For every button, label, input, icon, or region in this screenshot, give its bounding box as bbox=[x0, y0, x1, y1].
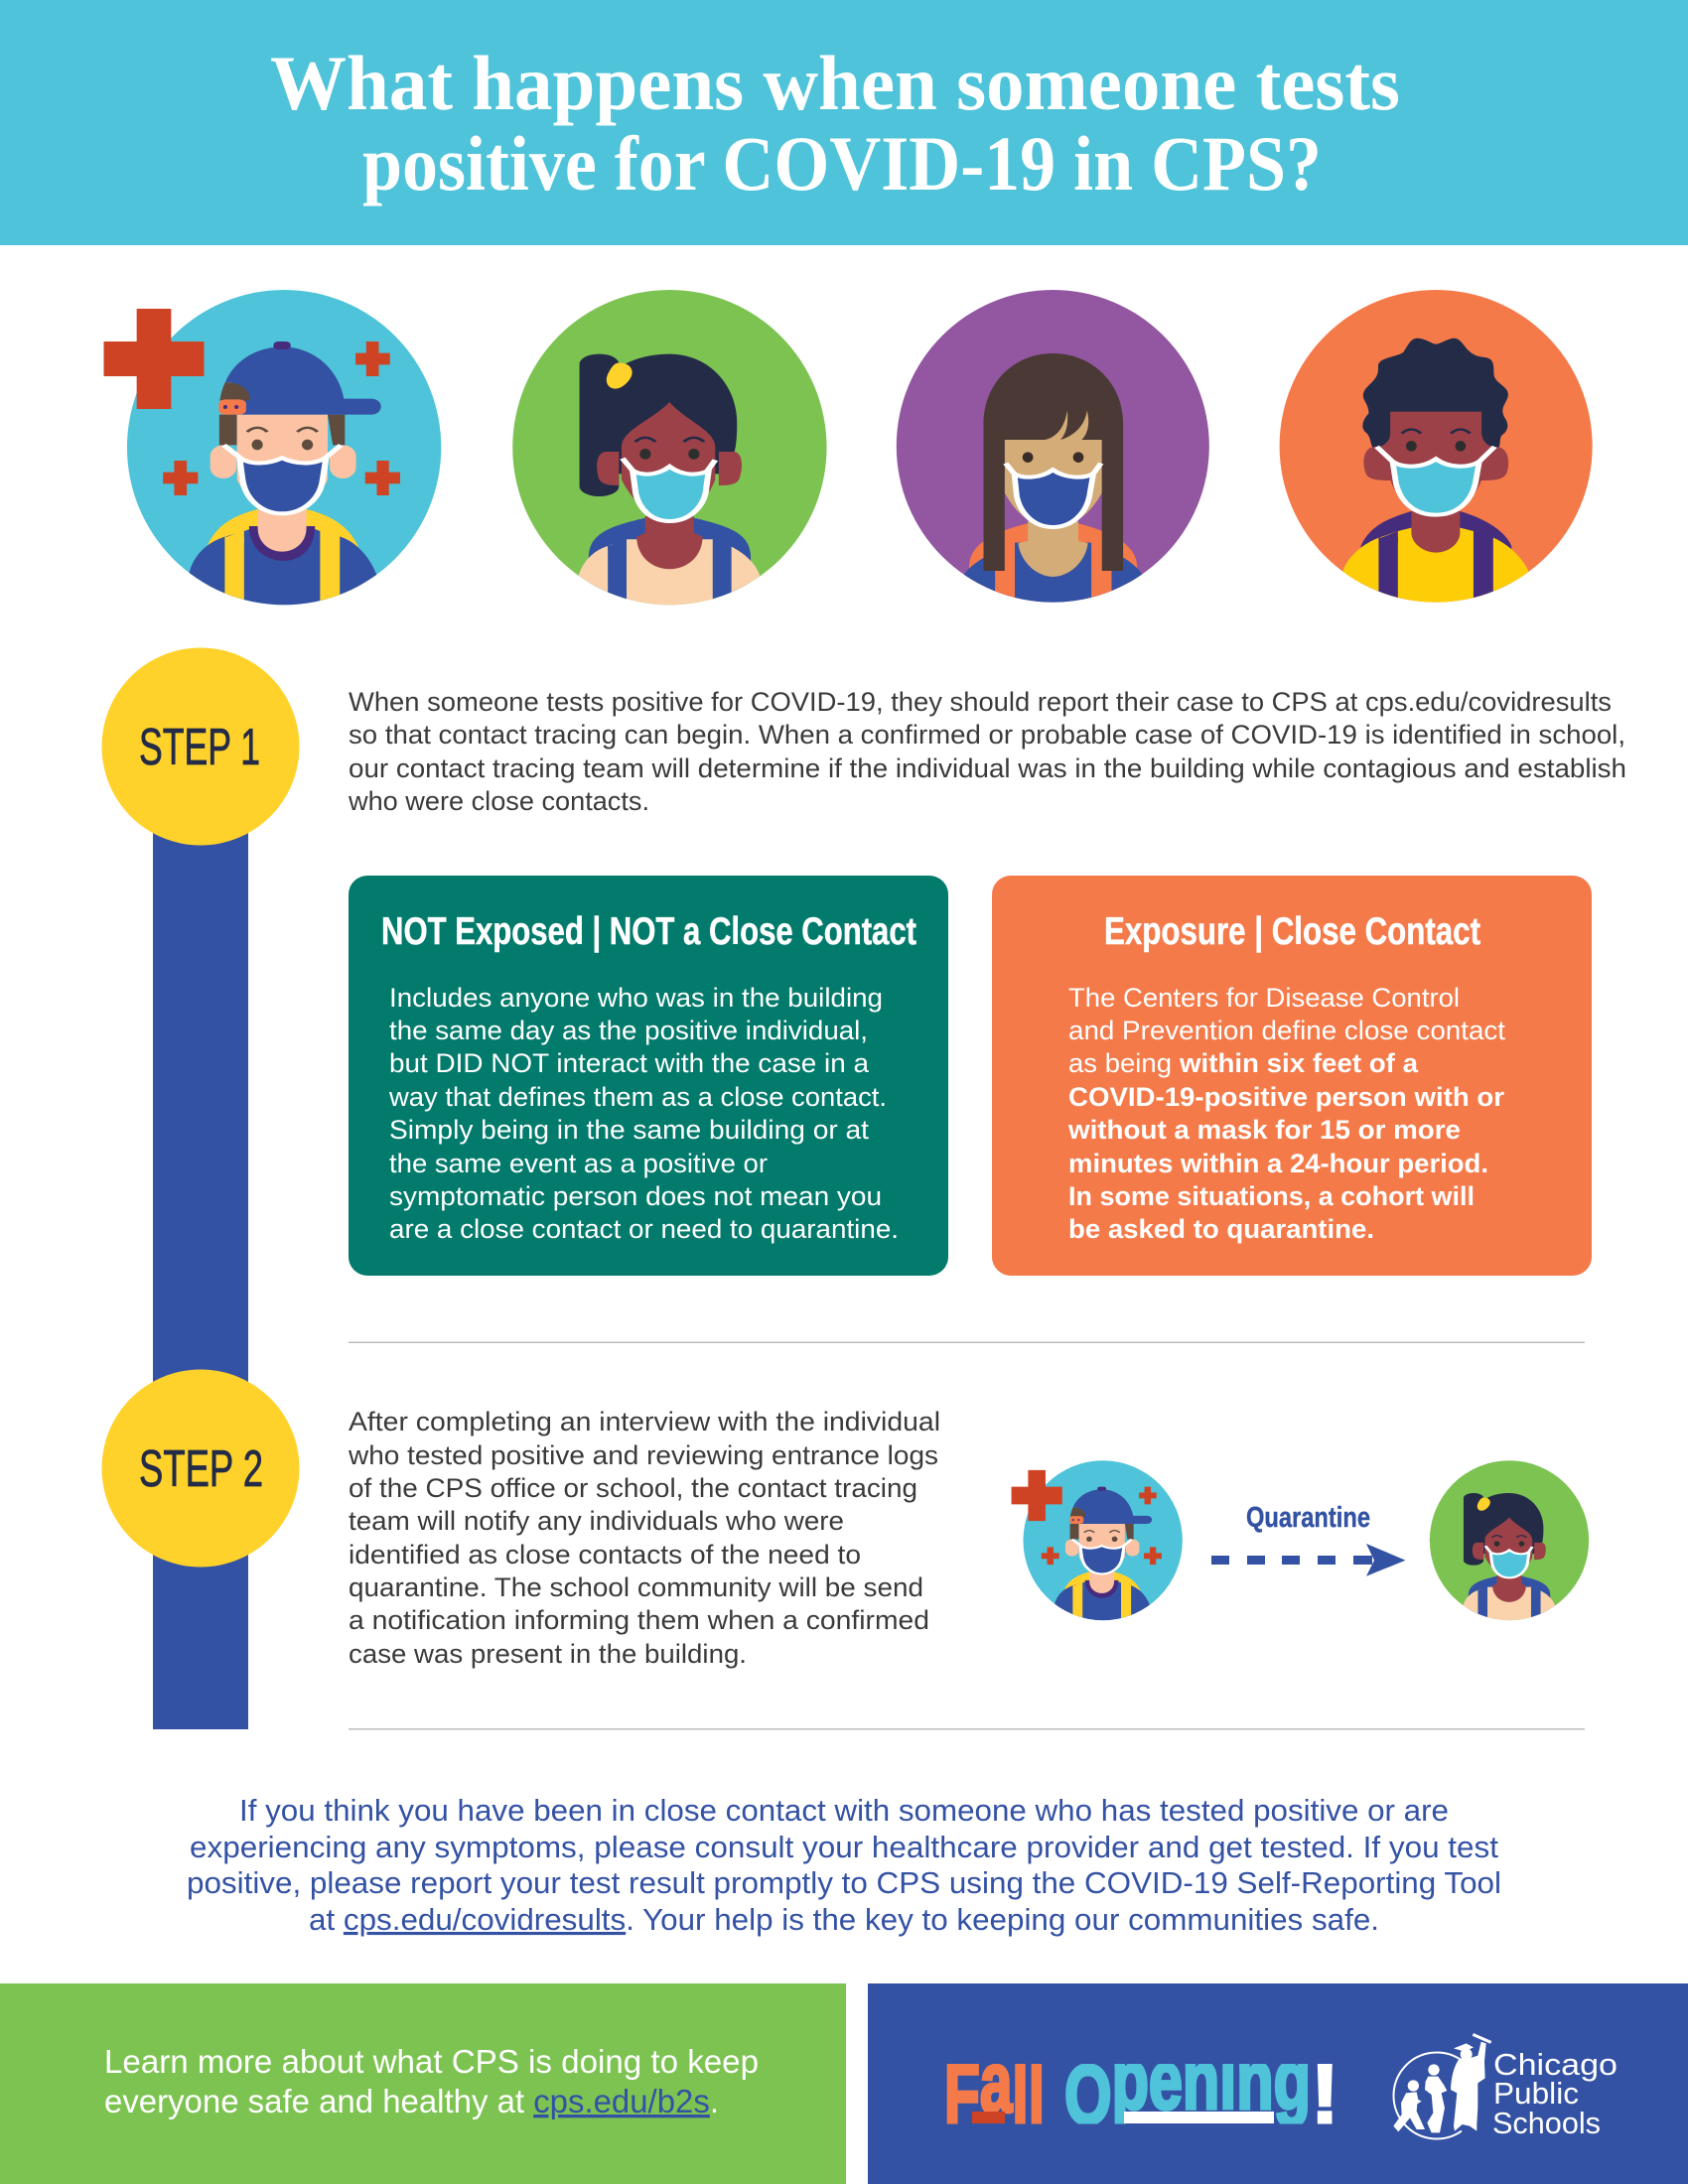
logo: fall opening: O bbox=[1064, 2048, 1129, 2141]
text: not exposed body bbox=[388, 983, 899, 1244]
logo: chicago public schools bbox=[1393, 2034, 1618, 2140]
step 1 text: our contact tracing team will determine if the individual was in the building while contagious and establish bbox=[349, 753, 1626, 783]
text: not exposed body: are a close contact or need to quarantine. bbox=[389, 1214, 899, 1244]
title: positive for COVID-19 in CPS? bbox=[362, 120, 1322, 206]
step 2 text bbox=[348, 1407, 940, 1669]
text: not exposed body: the same event as a positive or bbox=[389, 1149, 768, 1178]
icon: small contact student bbox=[1430, 1460, 1589, 1621]
step 2 text: identified as close contacts of the need to bbox=[349, 1540, 861, 1570]
step 1 badge bbox=[101, 647, 300, 846]
logo: fall opening bbox=[947, 2064, 1333, 2124]
logo: chicago public schools: Schools bbox=[1492, 2106, 1601, 2140]
heading: exposure: Exposure | Close Contact bbox=[1104, 910, 1480, 953]
text: exposure body: COVID-19-positive person with or bbox=[1068, 1082, 1505, 1112]
title bbox=[270, 40, 1400, 206]
illustration: student with cap, positive case bbox=[103, 290, 441, 607]
icon: small positive student bbox=[1012, 1460, 1183, 1621]
illustration: student with long hair bbox=[897, 290, 1209, 606]
header banner bbox=[0, 0, 1688, 245]
text: not exposed body: way that defines them as a close contact. bbox=[388, 1082, 887, 1112]
logo: chicago public schools: Chicago bbox=[1493, 2047, 1618, 2082]
text: exposure body: The Centers for Disease Control bbox=[1068, 983, 1460, 1013]
label: quarantine: Quarantine bbox=[1246, 1502, 1370, 1534]
step 2 text: team will notify any individuals who were bbox=[349, 1506, 844, 1536]
title: What happens when someone tests bbox=[270, 40, 1400, 126]
step 2 text: After completing an interview with the individual bbox=[349, 1407, 940, 1436]
illustration: student with curly hair bbox=[1280, 290, 1593, 606]
text: exposure body: without a mask for 15 or more bbox=[1067, 1115, 1461, 1145]
footer panel: learn more: everyone safe and healthy at cps.edu/b2s. bbox=[104, 2083, 719, 2119]
text: exposure body bbox=[1067, 983, 1506, 1244]
icon: medical crosses bbox=[103, 309, 400, 495]
timeline bar bbox=[153, 824, 248, 1729]
step 1 text: so that contact tracing can begin. When a confirmed or probable case of COVID-19 is identified in school, bbox=[349, 720, 1625, 750]
call to action text: experiencing any symptoms, please consult your healthcare provider and get tested. If you test bbox=[190, 1830, 1498, 1864]
step 1 text: When someone tests positive for COVID-19, they should report their case to CPS at cps.edu/covidresults bbox=[349, 687, 1612, 717]
illustration: student with ponytail bbox=[512, 290, 827, 607]
call to action text: If you think you have been in close contact with someone who has tested positive or are bbox=[239, 1793, 1449, 1828]
panel: not exposed bbox=[349, 876, 948, 1276]
text: not exposed body: symptomatic person does not mean you bbox=[389, 1181, 882, 1211]
text: not exposed body: Includes anyone who was in the building bbox=[389, 983, 883, 1013]
heading: not exposed: NOT Exposed | NOT a Close Contact bbox=[381, 910, 916, 953]
logo: fall opening: ! bbox=[1311, 2047, 1339, 2142]
arrow: quarantine bbox=[1211, 1544, 1406, 1576]
call to action text: at cps.edu/covidresults. Your help is the key to keeping our communities safe. bbox=[309, 1902, 1379, 1937]
panel: exposure bbox=[992, 876, 1592, 1276]
logo: chicago public schools: Public bbox=[1493, 2076, 1579, 2111]
step 2 text: a notification informing them when a confirmed bbox=[349, 1605, 929, 1635]
text: exposure body: and Prevention define close contact bbox=[1068, 1016, 1506, 1045]
step 1 text bbox=[348, 687, 1626, 816]
logo: fall opening: a bbox=[980, 2035, 1013, 2130]
step 2 text: who tested positive and reviewing entrance logs bbox=[348, 1440, 938, 1470]
call to action text bbox=[187, 1793, 1501, 1937]
footer panel: logos bbox=[868, 1983, 1688, 2184]
footer panel: learn more bbox=[0, 1983, 846, 2184]
footer panel: learn more: Learn more about what CPS is doing to keep bbox=[104, 2043, 759, 2080]
text: exposure body: within six feet of a bbox=[1179, 1048, 1419, 1078]
text: exposure body: as being bbox=[1068, 1048, 1172, 1078]
logo: fall opening: pening bbox=[1112, 2033, 1311, 2126]
text: not exposed body: Simply being in the same building or at bbox=[389, 1115, 870, 1145]
text: exposure body: In some situations, a cohort will bbox=[1068, 1181, 1475, 1211]
step 2 text: quarantine. The school community will be send bbox=[349, 1572, 923, 1602]
step 2 badge: STEP 2 bbox=[139, 1440, 263, 1498]
text: exposure body: be asked to quarantine. bbox=[1068, 1214, 1374, 1244]
step 2 badge bbox=[101, 1370, 300, 1567]
call to action text: positive, please report your test result promptly to CPS using the COVID-19 Self-Reporting Tool bbox=[187, 1865, 1501, 1900]
step 1 text: who were close contacts. bbox=[348, 786, 649, 816]
step 1 badge: STEP 1 bbox=[139, 719, 260, 776]
text: not exposed body: but DID NOT interact with the case in a bbox=[389, 1048, 870, 1078]
logo: fall opening: F bbox=[944, 2047, 997, 2142]
logo: fall opening: ll bbox=[1012, 2047, 1045, 2142]
step 2 text: of the CPS office or school, the contact tracing bbox=[349, 1473, 917, 1503]
text: not exposed body: the same day as the positive individual, bbox=[389, 1016, 868, 1045]
step 2 text: case was present in the building. bbox=[349, 1639, 747, 1669]
text: exposure body: minutes within a 24-hour period. bbox=[1068, 1149, 1488, 1178]
